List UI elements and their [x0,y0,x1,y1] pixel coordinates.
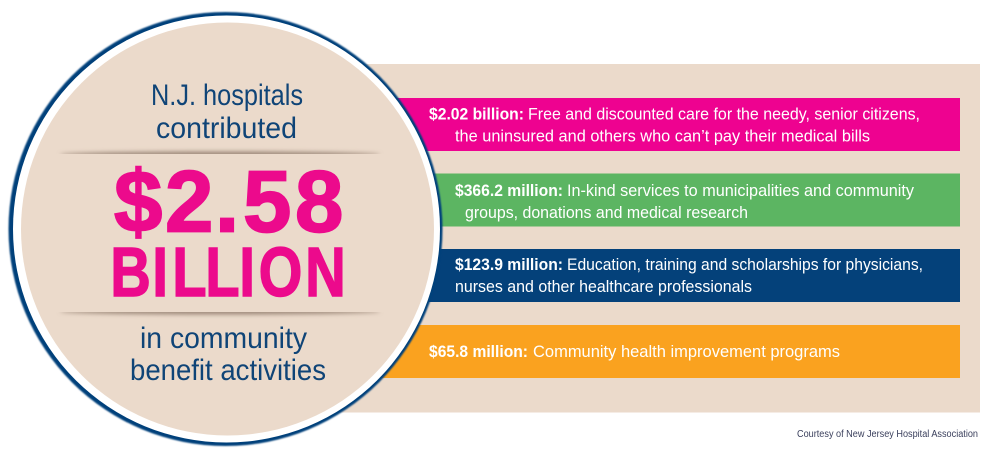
divider shadow: top [60,149,380,154]
text: $123.9 million item: nurses and other healthcare professionals [455,277,752,296]
subheading: in community benefit activities: in community [140,322,307,355]
text: $123.9 million item [455,255,923,296]
divider shadow: bottom [60,312,380,317]
text: $366.2 million item: groups, donations and medical research [465,203,748,222]
subheading: in community benefit activities: benefit activities [130,354,326,387]
text: $65.8 million item: $65.8 million: [429,342,528,361]
subheading: in community benefit activities [130,322,326,387]
circle: outer ring [8,12,442,446]
bar: $2.02 billion background [300,98,960,151]
text: $2.02 billion item: Free and discounted care for the needy, senior citizens, [528,104,920,124]
credit: Courtesy of New Jersey Hospital Association [797,429,978,440]
text: $65.8 million item: Community health improvement programs [533,342,840,361]
panel: background [300,64,980,412]
big number: $2.58 billion: $2.58 [114,154,343,250]
text: $2.02 billion item [429,104,920,146]
circle: white ring [13,16,440,442]
text: $366.2 million item [455,181,914,222]
text: $366.2 million item: In-kind services to municipalities and community [567,181,914,200]
heading: N.J. hospitals contributed [151,79,303,145]
big number: $2.58 billion: BILLION [110,234,346,311]
text: $366.2 million item: $366.2 million: [455,181,563,200]
text: $2.02 billion item: $2.02 billion: [429,104,524,124]
big number: $2.58 billion [110,154,346,311]
text: $2.02 billion item: the uninsured and others who can’t pay their medical bills [455,126,870,146]
circle: beige fill [21,22,434,436]
bar: $366.2 million background [300,174,960,226]
bar: $123.9 million background [300,249,960,302]
text: $123.9 million item: Education, training and scholarships for physicians, [567,255,923,274]
bar: $65.8 million background [300,325,960,378]
heading: N.J. hospitals contributed: contributed [156,112,297,145]
heading: N.J. hospitals contributed: N.J. hospitals [151,79,303,112]
text: $123.9 million item: $123.9 million: [455,255,563,274]
